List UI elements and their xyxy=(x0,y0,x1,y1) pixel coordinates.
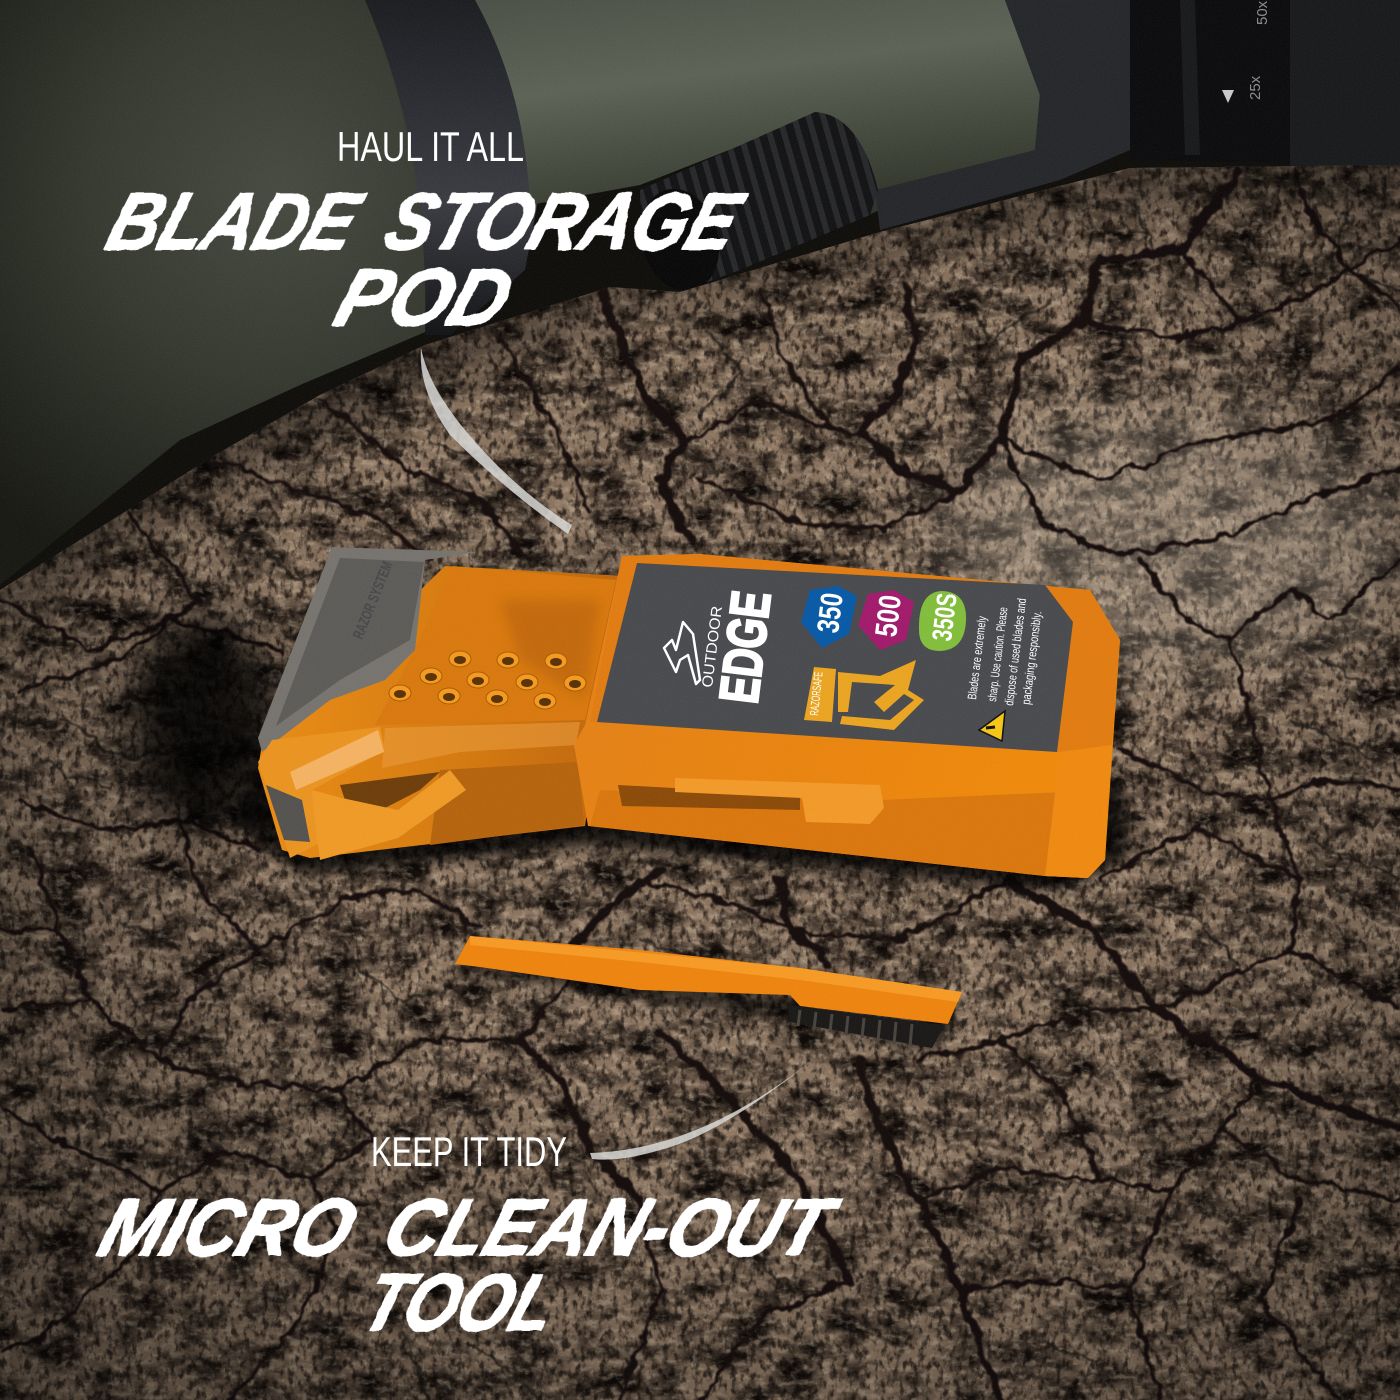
title line: blade storage: BLADE STORAGE xyxy=(97,178,753,267)
wood: tool shadow xyxy=(460,950,950,1052)
vent hole rims xyxy=(389,651,586,709)
arrow stroke to pod xyxy=(421,348,572,534)
pod: cap textured panel xyxy=(276,558,424,726)
pod: latch lighter wedge xyxy=(290,730,384,790)
pod: latch U-tab xyxy=(312,770,466,860)
scope: large green body xyxy=(0,0,430,585)
scope: focus knob xyxy=(640,112,878,292)
label: caution text xyxy=(965,597,1044,706)
razorsafe: gold tag xyxy=(804,667,836,722)
scope: eyepiece green section xyxy=(475,0,1040,235)
pod: slide top face shading xyxy=(375,566,616,725)
title line: pod: POD xyxy=(325,254,523,343)
tool: orange handle xyxy=(455,936,962,1024)
label: 350S badge xyxy=(919,591,966,651)
label: 350S badge: 350S xyxy=(926,591,963,643)
caution line 2: sharp. Use caution. Please xyxy=(985,606,1011,702)
pod: vent holes xyxy=(389,651,586,709)
title line: micro clean-out: MICRO CLEAN-OUT xyxy=(89,1184,847,1273)
micro clean-out tool xyxy=(455,936,962,1048)
pod: grey cap xyxy=(258,547,478,752)
razorsafe: R mark xyxy=(838,660,924,730)
wood: product shadow xyxy=(130,615,280,835)
pod: slide inner dark glow xyxy=(500,600,600,700)
heading group: micro clean-out tool xyxy=(89,1128,847,1348)
caution line 3: dispose of used blades and xyxy=(1002,597,1029,706)
pod: case rail tab xyxy=(675,778,884,824)
pod: outer case body xyxy=(574,554,1120,878)
label: 350 badge xyxy=(801,586,857,648)
scope: knob end cap xyxy=(630,180,730,300)
razorsafe: tag text: RAZORSAFE xyxy=(807,671,826,716)
scope: dark focus section xyxy=(875,0,1135,230)
tool: bristles xyxy=(788,1005,945,1048)
pod: grey label xyxy=(597,563,1073,752)
scope: zoom marking 50x: 50x xyxy=(1254,0,1271,25)
logo: mountain mark xyxy=(664,622,700,684)
vent hole centers xyxy=(394,656,581,706)
label: 350 badge: 350 xyxy=(810,591,850,635)
spotting scope xyxy=(0,0,1400,585)
scope: dark collar band xyxy=(365,0,540,335)
scope: zoom marking 25x: 25x xyxy=(1247,75,1264,100)
pod: translucent slide body xyxy=(258,566,625,858)
scope: barrel ribbing xyxy=(1180,0,1400,170)
heading group: blade storage pod xyxy=(97,123,753,343)
scope: index triangle xyxy=(1222,90,1234,103)
pod: dark window slot xyxy=(618,785,800,810)
blade storage pod xyxy=(258,547,1120,878)
wood: upper shadow cast by the scope xyxy=(0,165,1400,620)
wood: lit area xyxy=(930,410,1400,670)
tool: bristle tips xyxy=(798,1010,912,1046)
caution line 1: Blades are extremely xyxy=(965,615,989,700)
pod: cap emblem text: RAZOR SYSTEM xyxy=(350,559,396,641)
label: 500 badge: 500 xyxy=(868,593,908,639)
pod: case top edge xyxy=(590,554,1120,752)
pod: slide rail xyxy=(382,722,580,768)
title line: tool: TOOL xyxy=(352,1259,569,1348)
pod: case front lower facet xyxy=(590,790,1110,878)
eyebrow: haul it all: HAUL IT ALL xyxy=(337,123,524,170)
label: razorsafe logo xyxy=(804,660,924,730)
label: EDGE logo xyxy=(664,588,783,706)
logo: OUTDOOR: OUTDOOR xyxy=(699,605,726,688)
pod: lower slide shaded band xyxy=(430,762,584,845)
pod: latch window xyxy=(340,772,440,808)
caution line 4: packaging responsibly. xyxy=(1019,610,1044,705)
pod: front latch hood xyxy=(258,727,385,858)
scope: black lens barrel xyxy=(1130,0,1400,165)
arrow stroke to tool xyxy=(590,1058,815,1160)
pod: grey blade carrier end xyxy=(266,785,310,842)
logo: EDGE: EDGE xyxy=(707,588,783,706)
label: 500 badge xyxy=(858,590,914,650)
pod: right facet lighter xyxy=(1045,745,1112,878)
eyebrow: keep it tidy: KEEP IT TIDY xyxy=(371,1128,567,1175)
tool: top highlight xyxy=(470,936,962,1002)
wood: underside shadow xyxy=(235,760,1125,890)
label: warning triangle xyxy=(979,711,1005,741)
